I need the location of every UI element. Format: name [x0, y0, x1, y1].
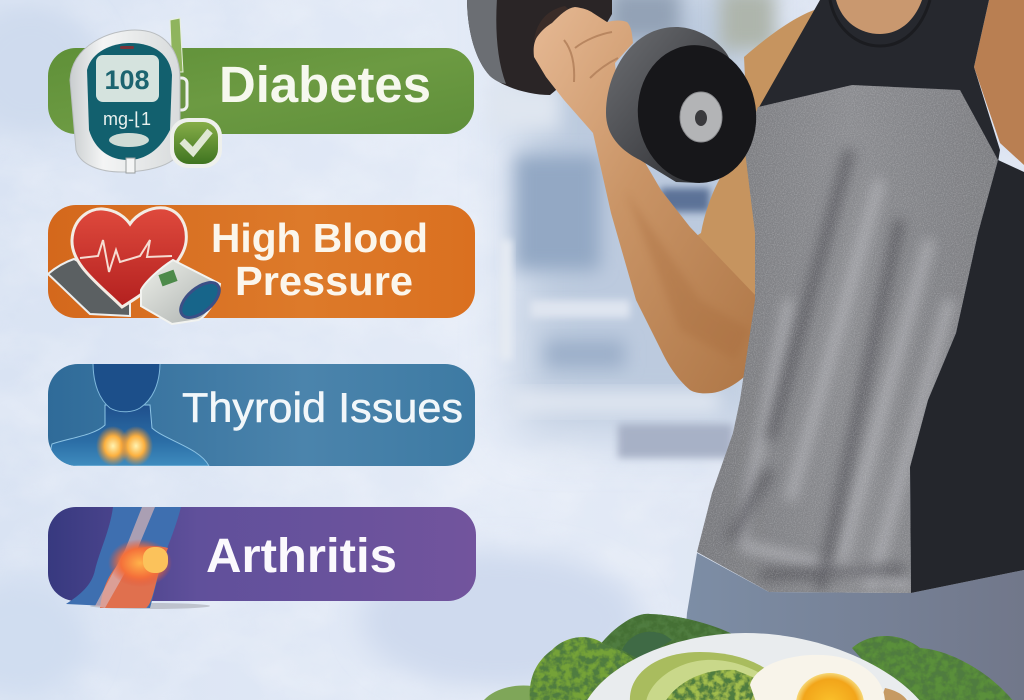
- avocado inner: [646, 660, 758, 700]
- orange pill: [48, 205, 475, 318]
- monitor device: [141, 260, 220, 324]
- skin: neck: [830, 0, 930, 50]
- check badge: [170, 118, 222, 168]
- background: blurred gym scene: [490, 0, 775, 458]
- display: [96, 55, 159, 102]
- inflamed joint: [100, 546, 168, 608]
- icon: neck and glowing thyroid: [51, 362, 209, 466]
- icon: leg and glowing knee: [66, 507, 181, 608]
- meter body: [70, 30, 180, 172]
- skin: far right arm: [974, 0, 1024, 165]
- antenna strip: [170, 18, 183, 72]
- chopped greens: [665, 670, 760, 700]
- side clip: [172, 78, 187, 110]
- panel: high blood pressure: [48, 205, 475, 324]
- panel: diabetes: [48, 18, 474, 173]
- egg yolk: [796, 673, 864, 700]
- knuckle lines: [564, 32, 618, 82]
- toast: [880, 688, 908, 700]
- dumbbell: handle: [534, 6, 580, 60]
- purple pill: [48, 507, 476, 601]
- panel: arthritis: [48, 507, 476, 609]
- unit: mg-⌊1: [103, 109, 151, 129]
- person lifting dumbbell: [467, 0, 1024, 700]
- spinach leaf: [484, 686, 535, 700]
- shorts: [680, 553, 1024, 700]
- leaf on broccoli: [622, 632, 672, 660]
- tank top: grey front panel: [690, 80, 1010, 600]
- strip slot: [109, 133, 149, 147]
- kale behind plate: [596, 614, 732, 670]
- label line 1: High Blood: [211, 215, 428, 261]
- plate: [586, 633, 921, 700]
- label: Thyroid Issues: [182, 384, 463, 431]
- body silhouette: [51, 405, 209, 466]
- label: Arthritis: [206, 530, 397, 583]
- cuff: [48, 259, 130, 316]
- broccoli left: [530, 637, 640, 700]
- fried egg white: [750, 655, 885, 700]
- panel: thyroid issues: [48, 362, 475, 466]
- glow left lobe: [96, 426, 128, 466]
- avocado slice: [630, 652, 770, 700]
- reading: 108: [104, 65, 150, 95]
- blue pill: [48, 364, 475, 466]
- green pill: [48, 48, 474, 134]
- skin: upper arm and bicep: [690, 8, 820, 330]
- head: [93, 362, 160, 412]
- knee highlight: [143, 547, 168, 573]
- label line 2: Pressure: [235, 258, 413, 304]
- tank top: dark side panel: [910, 160, 1024, 593]
- label: Diabetes: [219, 56, 431, 113]
- glow right lobe: [122, 426, 152, 466]
- device display: [158, 270, 178, 286]
- collar band: [830, 0, 930, 46]
- ground shadow: [90, 603, 210, 609]
- broccoli right: [852, 636, 1014, 700]
- icon: glucose meter: [70, 18, 222, 173]
- forearm muscle shading: [625, 190, 750, 360]
- leg silhouette: [66, 507, 181, 608]
- pulse line: [80, 240, 172, 272]
- forearm and hand: [534, 7, 757, 393]
- indicator light: [120, 46, 134, 49]
- test strip: [126, 158, 135, 173]
- heart: [72, 208, 186, 307]
- dumbbell: rear plate rim: [467, 0, 506, 84]
- food plate with vegetables: [484, 614, 1014, 700]
- tendon: [95, 507, 155, 608]
- teal face: [87, 43, 172, 160]
- dumbbell: metal hub: [680, 92, 722, 142]
- icon: heart with cuff: [48, 208, 225, 324]
- dumbbell: rear plate: [467, 0, 612, 95]
- dumbbell: front plate: [606, 27, 765, 191]
- knee glow: [108, 539, 172, 587]
- device lens: [175, 276, 225, 324]
- tank top: dark chest yoke: [758, 0, 1000, 162]
